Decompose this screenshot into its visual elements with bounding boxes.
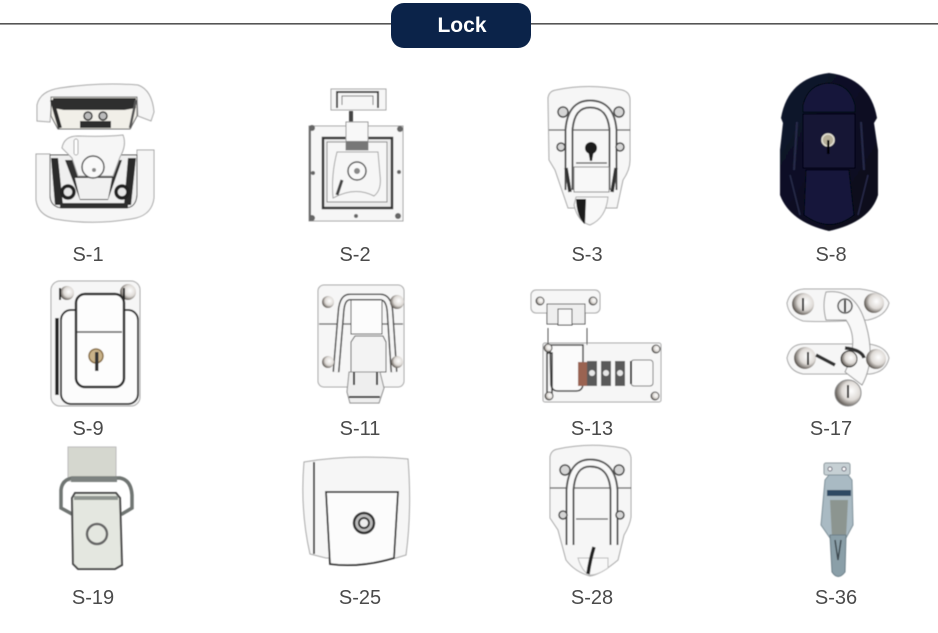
item S-28: [550, 445, 631, 609]
label: S-1: [72, 244, 104, 266]
section header rule: [0, 23, 938, 25]
label: S-3: [571, 244, 603, 266]
item S-19: [61, 447, 132, 609]
label: S-17: [810, 418, 852, 440]
item S-11: [318, 285, 404, 440]
item S-17: [787, 289, 889, 440]
item S-13: [531, 290, 661, 440]
icon: S-11 draw latch: [318, 285, 404, 403]
icon: S-25 square lock: [303, 457, 410, 565]
icon: S-2 recessed latch: [309, 89, 403, 221]
label: S-2: [339, 244, 371, 266]
icon: S-36 blue zinc latch: [821, 463, 853, 576]
icon: S-9 brass-key latch: [51, 281, 140, 406]
icon: S-3 draw latch: [548, 86, 630, 225]
icon: S-1 butterfly latch: [36, 84, 154, 222]
title badge: Lock: Lock: [437, 14, 487, 37]
item S-9: [51, 281, 140, 440]
icon: S-13 combination lock: [531, 290, 661, 402]
icon: S-19 toggle latch: [61, 447, 132, 569]
icon: S-17 swing hasp: [787, 289, 889, 406]
item S-2: [309, 89, 403, 266]
label: S-28: [571, 587, 613, 609]
label: S-8: [815, 244, 847, 266]
item S-8: [780, 73, 878, 266]
label: S-11: [340, 418, 380, 440]
item S-1: [36, 84, 154, 266]
label: S-9: [72, 418, 104, 440]
label: S-13: [571, 418, 613, 440]
item S-3: [548, 86, 630, 266]
item S-25: [303, 457, 410, 609]
label: S-25: [339, 587, 381, 609]
title badge: Lock: [391, 3, 531, 48]
label: S-19: [72, 587, 114, 609]
icon: S-8 black latch: [780, 73, 878, 231]
label: S-36: [815, 587, 857, 609]
item S-36: [815, 463, 857, 609]
icon: S-28 draw latch: [550, 445, 631, 576]
